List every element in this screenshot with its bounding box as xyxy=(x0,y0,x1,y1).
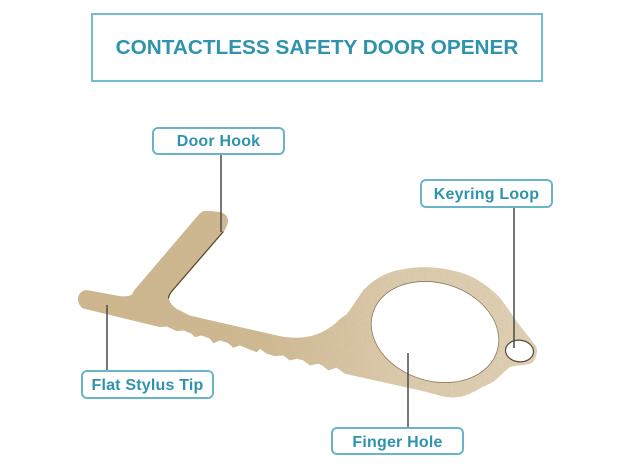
label: flat stylus tip xyxy=(81,370,214,399)
label: flat stylus tip: Flat Stylus Tip xyxy=(91,377,204,394)
label: door hook xyxy=(152,127,285,155)
door opener tool with pointer lines xyxy=(78,155,537,427)
pointer line: keyring loop xyxy=(513,207,515,348)
pointer line: flat stylus tip xyxy=(106,305,108,371)
pointer line: finger hole xyxy=(407,353,409,428)
title: CONTACTLESS SAFETY DOOR OPENER xyxy=(116,36,518,59)
pointer line: door hook xyxy=(220,155,222,232)
label: finger hole: Finger Hole xyxy=(352,434,443,451)
label: keyring loop xyxy=(420,179,553,208)
title xyxy=(91,13,543,82)
tool body xyxy=(78,211,537,398)
label: keyring loop: Keyring Loop xyxy=(434,186,539,203)
hole and edge shading xyxy=(168,232,535,398)
label: door hook: Door Hook xyxy=(177,133,260,150)
label: finger hole xyxy=(331,427,464,455)
